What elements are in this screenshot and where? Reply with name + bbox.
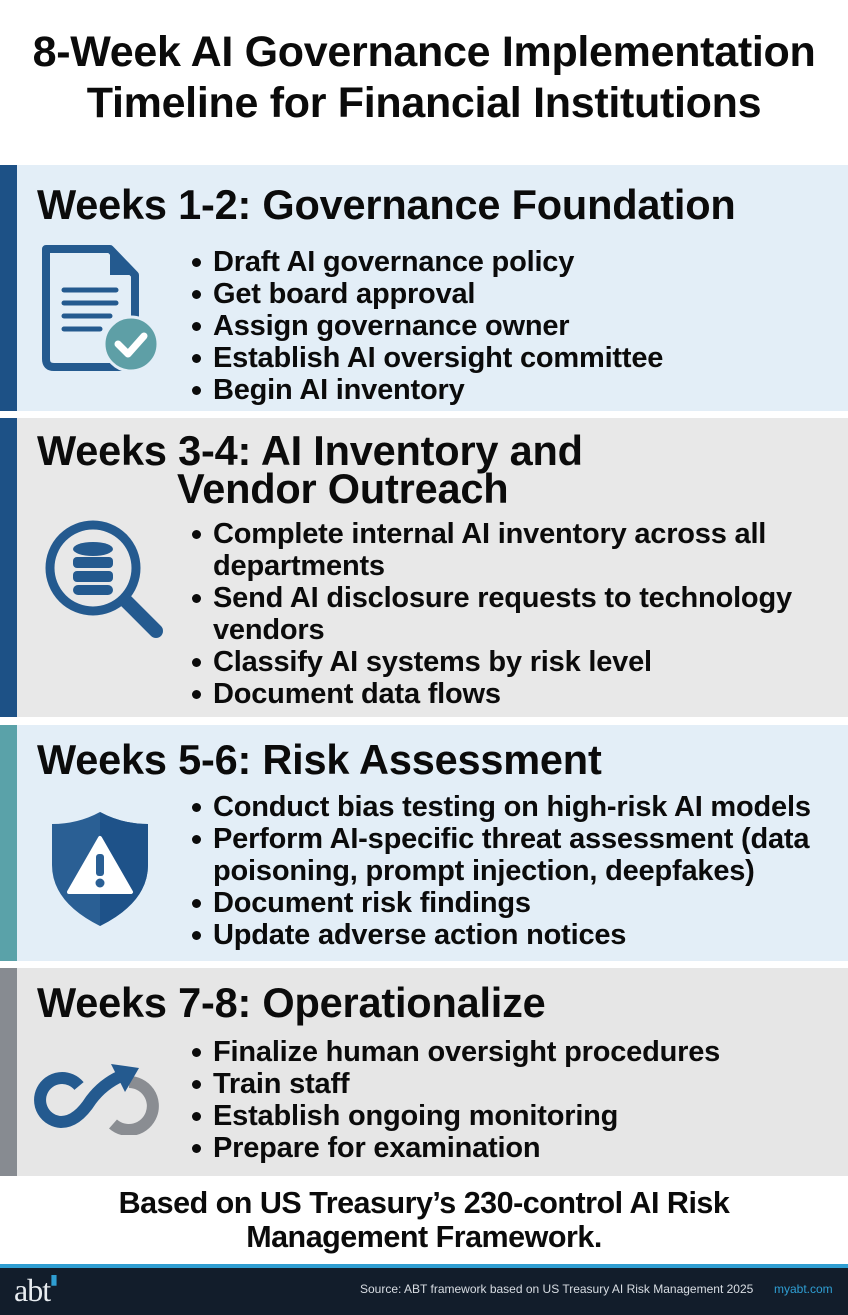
heading: weeks 5-6: Weeks 5-6: Risk Assessment	[37, 736, 602, 783]
logo: abt: abt▮	[14, 1272, 57, 1308]
bullets: weeks 1-2: Get board approval	[213, 278, 475, 310]
panel: weeks 3-4	[0, 418, 848, 717]
heading: weeks 3-4	[37, 427, 583, 512]
heading: weeks 1-2: Weeks 1-2: Governance Foundation	[37, 181, 736, 228]
footer bar	[0, 1264, 848, 1315]
bullets: weeks 3-4: Send AI disclosure requests to technology	[213, 582, 792, 614]
title: 8-Week AI Governance Implementation	[33, 28, 815, 76]
bullets: weeks 5-6	[192, 791, 811, 951]
icon: magnifier with database	[46, 520, 163, 638]
icon: infinity loop arrow	[34, 1064, 159, 1135]
title	[33, 28, 815, 127]
panel: weeks 5-6	[0, 725, 848, 961]
bullets: weeks 3-4: Complete internal AI inventory across all	[213, 518, 766, 550]
bullets: weeks 3-4: departments	[213, 550, 385, 582]
bullets: weeks 5-6: Perform AI-specific threat assessment (data	[213, 823, 809, 855]
bullets: weeks 1-2: Begin AI inventory	[213, 374, 465, 406]
panel: weeks 1-2	[0, 165, 848, 411]
bullets: weeks 5-6: Conduct bias testing on high-risk AI models	[213, 791, 811, 823]
footer note: Based on US Treasury’s 230-control AI Risk	[119, 1186, 729, 1220]
bullets: weeks 5-6: poisoning, prompt injection, deepfakes)	[213, 855, 755, 887]
title: Timeline for Financial Institutions	[87, 79, 761, 127]
heading: weeks 3-4: Weeks 3-4: AI Inventory and	[37, 427, 583, 474]
panel: weeks 7-8	[0, 968, 848, 1176]
bullets: weeks 3-4: Document data flows	[213, 678, 501, 710]
bullets: weeks 5-6: Update adverse action notices	[213, 919, 626, 951]
footer note	[119, 1186, 730, 1254]
bullets: weeks 7-8: Establish ongoing monitoring	[213, 1100, 618, 1132]
icon: document with check	[42, 245, 156, 371]
bullets: weeks 1-2	[192, 246, 663, 406]
bullets: weeks 3-4	[192, 518, 792, 710]
bullets: weeks 1-2: Assign governance owner	[213, 310, 569, 342]
bullets: weeks 3-4: Classify AI systems by risk level	[213, 646, 652, 678]
heading: weeks 3-4: Vendor Outreach	[177, 465, 508, 512]
bullets: weeks 7-8: Prepare for examination	[213, 1132, 540, 1164]
bullets: weeks 5-6: Document risk findings	[213, 887, 531, 919]
icon: shield warning	[52, 812, 148, 926]
bullets: weeks 1-2: Establish AI oversight committee	[213, 342, 663, 374]
bullets: weeks 7-8: Finalize human oversight procedures	[213, 1036, 720, 1068]
website: myabt.com	[774, 1282, 833, 1296]
footer note: Management Framework.	[246, 1220, 602, 1254]
bullets: weeks 1-2: Draft AI governance policy	[213, 246, 574, 278]
bullets: weeks 3-4: vendors	[213, 614, 324, 646]
source text: Source: ABT framework based on US Treasury AI Risk Management 2025	[360, 1282, 753, 1296]
bullets: weeks 7-8: Train staff	[213, 1068, 349, 1100]
heading: weeks 7-8: Weeks 7-8: Operationalize	[37, 979, 546, 1026]
bullets: weeks 7-8	[192, 1036, 720, 1164]
